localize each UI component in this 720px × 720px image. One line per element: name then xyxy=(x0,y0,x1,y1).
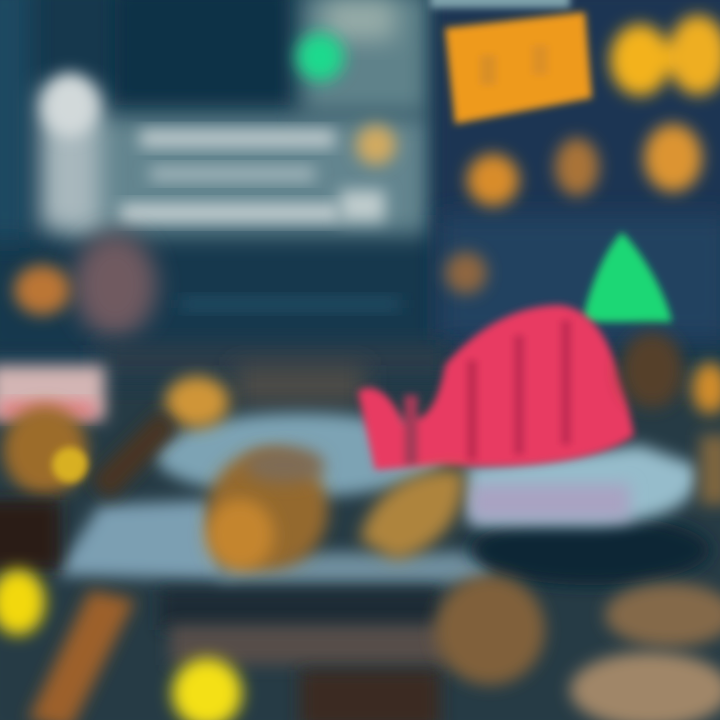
left figure and orange blob xyxy=(14,233,450,380)
icon: orange dots xyxy=(445,124,702,294)
gavel: left xyxy=(0,405,178,720)
table surface xyxy=(0,365,720,720)
icon: green triangle xyxy=(582,232,672,322)
plate xyxy=(465,445,710,585)
coins: right side xyxy=(570,332,720,720)
gavel: bottom xyxy=(160,575,545,720)
coins: centre xyxy=(165,376,463,571)
yellow blurred block xyxy=(610,15,720,96)
bar chart: red dome bars xyxy=(358,305,634,470)
screen: left monitor xyxy=(0,0,460,360)
panel: right dark screen xyxy=(430,0,720,340)
icon: green dot xyxy=(296,33,344,81)
heading: orange blurred block xyxy=(445,12,592,124)
